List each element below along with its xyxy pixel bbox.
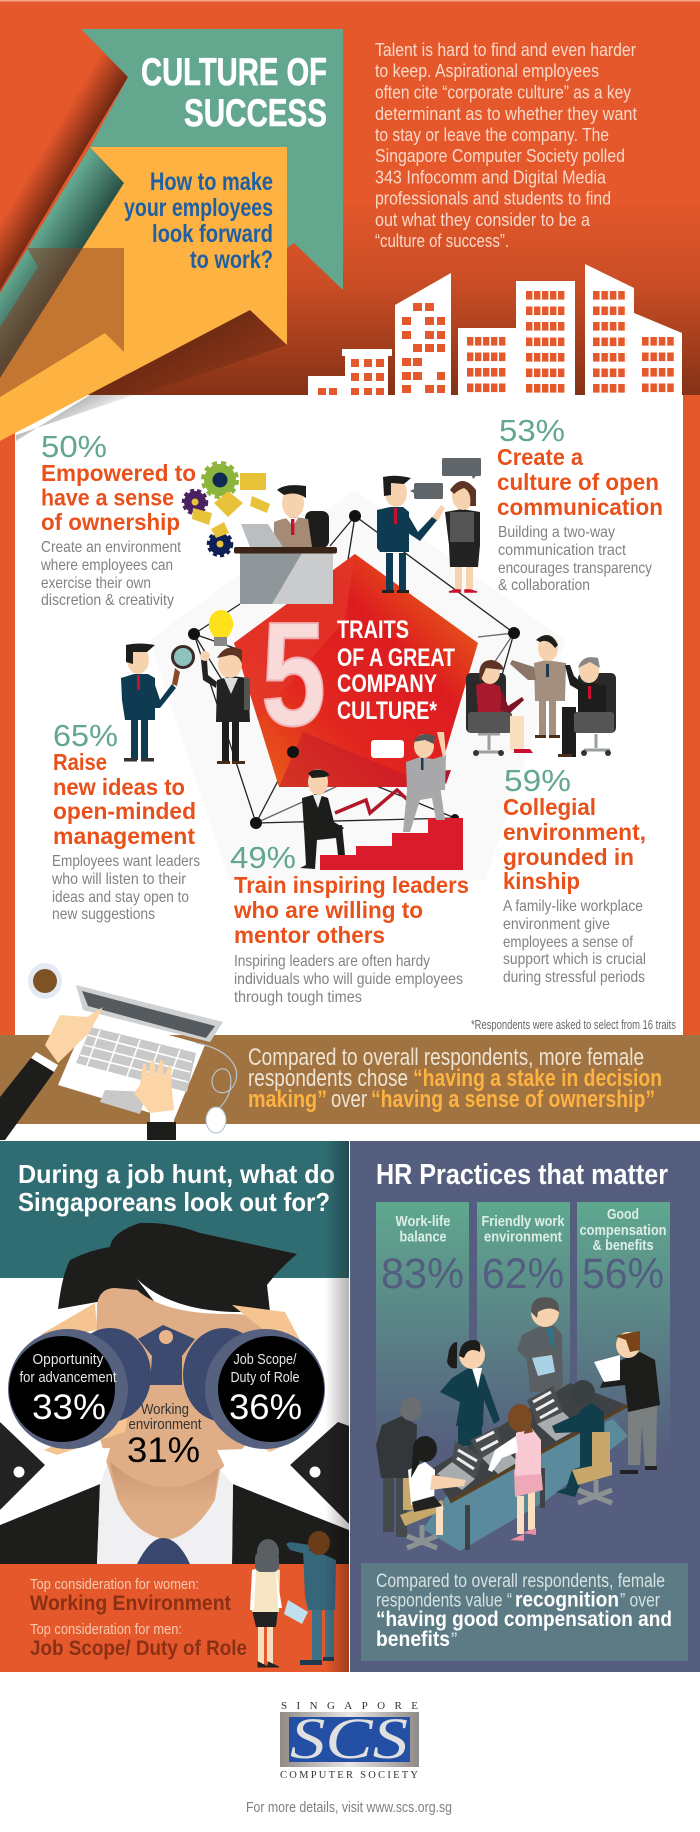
intro text: to stay or leave the company. The [375,125,609,145]
trait 59%: collegial: environment, [503,819,646,845]
trait 65%: new ideas: open-minded [53,798,196,824]
column: friendly environment: Friendly work [482,1213,565,1230]
illustration: man seated navy [552,1380,612,1503]
illustration: woman in navy [440,1340,500,1446]
considerations text: Top consideration for women: [30,1576,199,1593]
icon: mouse with cord [196,1043,237,1133]
icon: light bulb [209,610,233,646]
trait 53%: communication: encourages transparency [498,560,652,577]
trait 50%: empowered: where employees can [40,557,173,574]
neck shadow [110,1462,218,1507]
lens right: Job Scope/ [234,1352,297,1368]
SCS logo: COMPUTER SOCIETY [280,1770,418,1781]
trait 59%: collegial: A family-like workplace [503,898,643,915]
big number 5: 5 [261,592,326,757]
growth arrow [335,776,442,813]
speech bubble large [442,458,481,479]
trait 65%: new ideas: 65% [53,718,118,753]
trait 53%: communication: Building a two-way [498,524,615,541]
network nodes [188,510,520,829]
callout box: respondents value “ [376,1590,512,1612]
panel: HR practices [350,1141,700,1672]
callout box: ” [451,1630,457,1651]
orange footer strip [0,1564,349,1672]
subtitle [124,168,273,274]
icon: coffee cup [28,963,62,999]
traits heading: TRAITS [337,616,409,644]
intro text: 343 Infocomm and Digital Media [375,168,607,188]
buildings skyline [308,264,682,395]
trait 50%: empowered: Empowered to [41,460,196,486]
lens left: for advancement [20,1370,116,1386]
column: friendly environment: environment [484,1228,562,1246]
column: compensation: Good [607,1206,639,1223]
trait 49%: mentors: individuals who will guide employees [234,971,463,988]
intro text: professionals and students to find [375,188,611,208]
illustration: woman and man talking [250,1531,336,1667]
red stairs [320,818,463,870]
suit and collar [0,1422,349,1564]
illustration: man with magnifier [121,644,194,762]
subtitle: to work? [190,246,273,274]
header background [0,0,700,396]
considerations text: Working Environment [30,1592,231,1615]
column: friendly environment [477,1202,570,1450]
speech bubble white [371,740,404,758]
trait 65%: new ideas: management [53,823,195,849]
trait 65%: new ideas: Employees want leaders [52,853,200,870]
top edge [0,0,700,2]
panel: job hunt [0,1141,349,1672]
trait 49%: mentors: 49% [230,840,296,875]
column: compensation: compensation [580,1222,666,1239]
trait 50%: empowered: discretion & creativity [41,592,174,609]
trait 50%: empowered: exercise their own [41,575,151,592]
lens left [8,1329,128,1449]
intro text: Singapore Computer Society polled [375,146,625,166]
trait 59%: collegial: support which is crucial [503,951,646,968]
shadow under yellow arrow [50,310,287,395]
traits heading: CULTURE* [337,697,437,725]
illustration: floor and desk [423,1419,628,1551]
trait 65%: new ideas: new ideas to [53,774,185,800]
column: compensation [577,1202,670,1450]
column: work-life balance: 83% [381,1250,464,1298]
brown band text: respondents chose [248,1065,408,1092]
considerations text [30,1576,247,1660]
trait 65%: new ideas: ideas and stay open to [52,889,189,906]
header folded arrows [0,29,343,441]
lens right: Duty of Role [230,1370,300,1386]
trait 49%: mentors: who are willing to [233,897,423,923]
red pentagon [234,554,478,787]
intro text: Talent is hard to find and even harder [375,40,636,60]
binoculars body [69,1325,265,1422]
panel: five traits background [0,395,700,1040]
intro text [375,40,637,251]
illustration: seated team [466,635,616,757]
illustration: woman in black dress [445,481,480,592]
trait 49%: mentors: through tough times [234,989,362,1006]
traits heading [337,616,455,725]
illustration: man in grey left [376,1397,422,1537]
trait 50%: empowered [40,429,196,609]
trait 65%: new ideas: who will listen to their [51,871,187,888]
intro text: often cite “corporate culture” as a key [375,82,631,102]
illustration: seated woman [400,1436,466,1548]
trait 53%: communication: & collaboration [498,577,590,594]
page fold shadow [325,1141,349,1672]
trait 59%: collegial: environment give [503,916,610,933]
trait 49%: mentors: mentor others [234,922,385,948]
working environment stat: environment [128,1417,202,1433]
lens right [205,1329,325,1449]
pale backdrop pentagon [150,490,565,880]
speech bubble small [410,483,443,499]
trait 49%: mentors [230,840,469,1006]
column: compensation: & benefits [592,1237,654,1254]
title [141,51,327,135]
illustration: man in grey suit [517,1297,563,1392]
column: compensation: 56% [582,1250,664,1298]
column: work-life balance: balance [400,1228,446,1246]
trait 50%: empowered: Create an environment [41,539,181,556]
column: work-life balance [376,1202,469,1450]
trait 65%: new ideas: new suggestions [52,906,155,923]
subtitle: look forward [152,220,273,248]
column: friendly environment: 62% [482,1250,564,1298]
trait 49%: mentors: Inspiring leaders are often hardy [234,953,430,970]
heading [18,1159,335,1217]
illustration: laptops [437,1386,580,1490]
traits heading: COMPANY [337,670,437,698]
lens left: Opportunity [32,1352,104,1368]
trait 59%: collegial: kinship [503,868,580,894]
trait 53%: communication: culture of open [497,469,659,495]
heading: Singaporeans look out for? [18,1187,330,1217]
trait 59%: collegial: Collegial [503,794,596,820]
lens left: 33% [32,1388,106,1427]
SCS logo [280,1700,419,1781]
trait 59%: collegial: employees a sense of [503,934,633,951]
head hair [58,1223,297,1312]
title: SUCCESS [184,92,327,135]
footer link text: For more details, visit www.scs.org.sg [246,1800,452,1816]
subtitle: your employees [124,194,273,222]
icons: gears and envelopes [184,463,270,556]
intro text: “culture of success”. [375,231,509,251]
intro text: to keep. Aspirational employees [375,61,599,81]
brown band text: making” [248,1086,327,1113]
illustration: standing man talking [377,476,445,593]
intro text: determinant as to whether they want [375,104,637,124]
trait 59%: collegial: 59% [504,763,571,798]
hands [40,1303,300,1455]
illustration: laptop and hands [0,985,223,1140]
brown band text: over [331,1086,367,1113]
working environment stat [127,1402,202,1470]
trait 65%: new ideas [51,718,200,923]
considerations text: Top consideration for men: [30,1621,182,1638]
subtitle: How to make [150,168,273,196]
heading: During a job hunt, what do [18,1159,335,1189]
illustration: woman in pink [488,1404,543,1541]
brown band [0,1035,700,1124]
trait 59%: collegial: during stressful periods [503,969,645,986]
trait 53%: communication: communication tract [498,542,626,559]
network lines [194,516,514,823]
trait 50%: empowered: 50% [41,429,107,464]
illustration: man with raised hand [200,647,250,764]
callout box: benefits [376,1628,450,1651]
callout box [361,1563,688,1661]
callout box: ” over [620,1590,661,1612]
trait 65%: new ideas: Raise [53,749,107,775]
lens right: 36% [229,1388,302,1427]
callout box: “having good compensation and [376,1608,672,1631]
trait 53%: communication: communication [497,494,663,520]
trait 49%: mentors: Train inspiring leaders [234,872,469,898]
working environment stat: 31% [127,1431,200,1470]
trait 59%: collegial: grounded in [503,844,634,870]
trait 50%: empowered: have a sense [41,484,174,510]
trait 53%: communication: Create a [497,444,583,470]
traits heading: OF A GREAT [337,644,455,672]
trait 50%: empowered: of ownership [41,509,180,535]
brown band text [248,1044,662,1113]
trait 53%: communication [497,413,663,594]
working environment stat: Working [141,1402,189,1418]
column: work-life balance: Work-life [396,1213,450,1230]
trait 53%: communication: 53% [499,413,565,448]
intro text: out what they consider to be a [375,210,591,230]
SCS logo: SINGAPORE [281,1700,418,1712]
illustration: desk top [430,1383,627,1502]
considerations text: Job Scope/ Duty of Role [30,1637,247,1660]
illustration: man in black sweater [594,1331,660,1474]
trait 59%: collegial [503,763,646,986]
illustration: man sitting on stairs [300,769,345,869]
illustration: man climbing stairs [403,732,446,832]
SCS logo: SCS [290,1706,408,1771]
face and neck [95,1288,272,1540]
callout box: recognition [515,1588,619,1612]
illustration: man at desk [234,485,337,604]
title: CULTURE OF [141,51,327,94]
